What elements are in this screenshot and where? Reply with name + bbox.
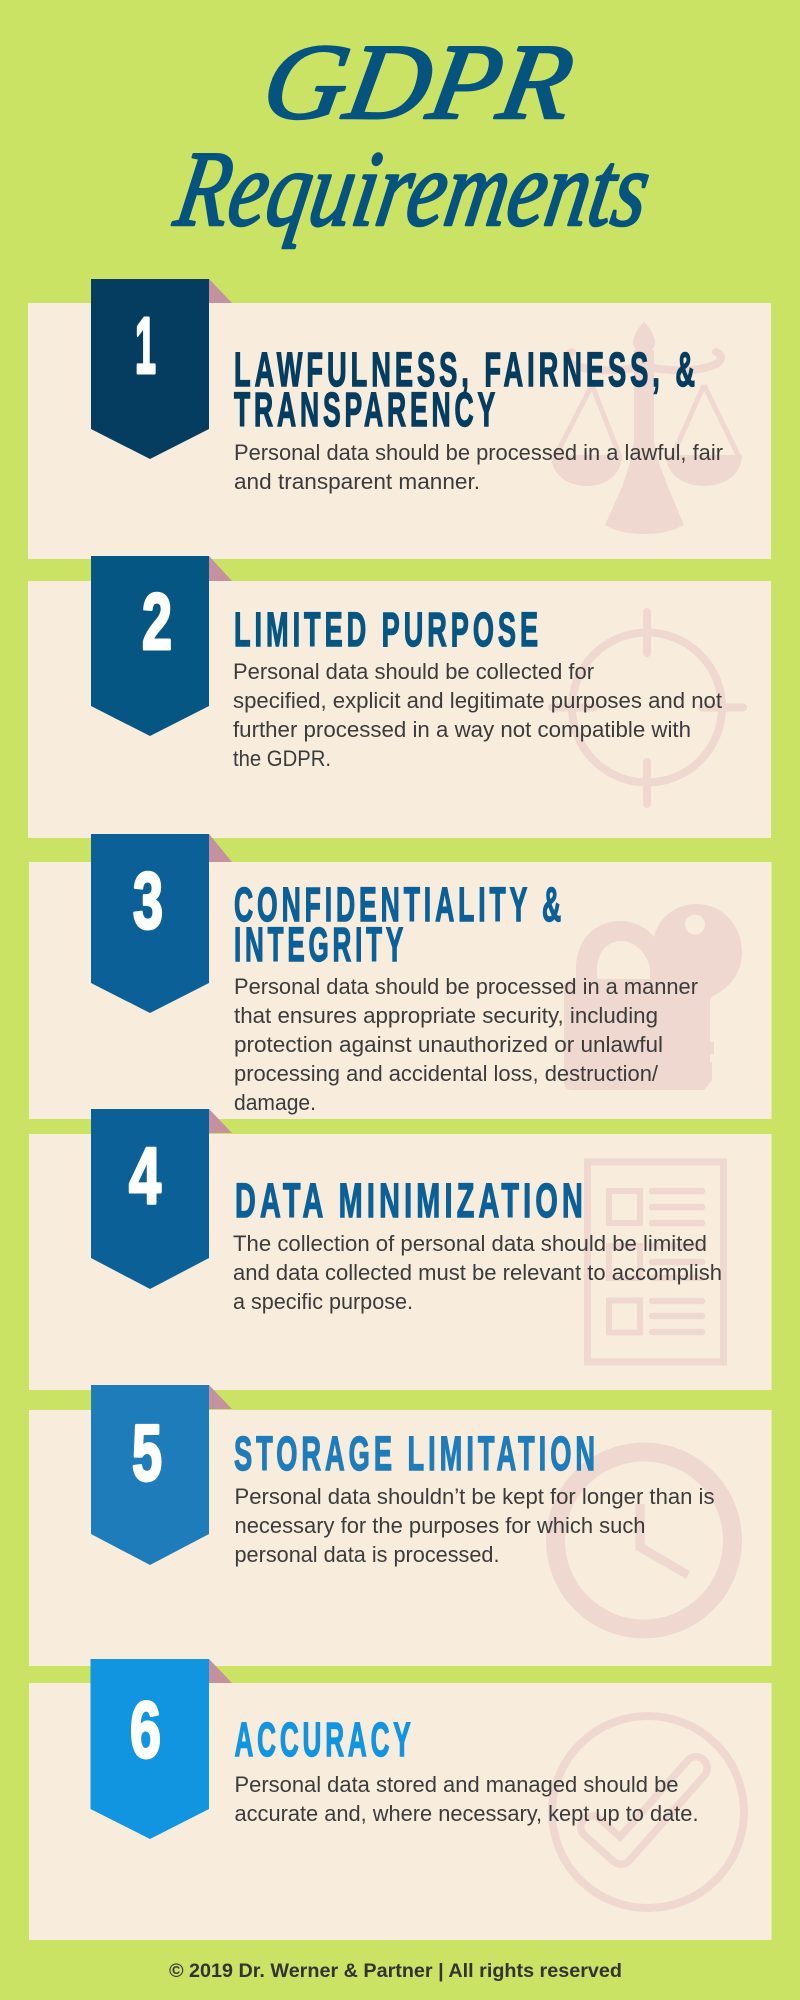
text: accuracy description [234,1772,698,1826]
text: lawfulness description: and transparent manner. [234,469,480,494]
heading 3: INTEGRITY [234,919,407,972]
icon: target crosshair [552,612,743,804]
panel: lawfulness, fairness and transparency [28,303,771,559]
text: accuracy description: Personal data stored and managed should be [234,1772,678,1797]
icon: document with checklist [588,1162,724,1362]
text: confidentiality description: that ensures appropriate security, including [234,1003,658,1028]
icon: scales of justice [551,322,742,534]
title [167,22,659,249]
ribbon 2 [91,556,232,736]
text: storage limitation description: Personal data shouldn’t be kept for longer than is [234,1484,714,1509]
ribbon 5: 5 [132,1408,162,1497]
panel: storage limitation [29,1410,772,1666]
panel: confidentiality and integrity [29,862,772,1119]
heading 1: TRANSPARENCY [234,384,499,437]
title: Requirements [167,129,659,249]
ribbon 1 [91,279,232,459]
text: limited purpose description: Personal data should be collected for [233,659,594,684]
text: limited purpose description [233,659,722,771]
heading 1 [234,344,699,437]
icon: clock [556,1452,732,1629]
ribbon 6 [90,1659,232,1839]
ribbon 4: 4 [129,1131,161,1220]
ribbon 1: 1 [135,301,156,390]
text: confidentiality description: processing and accidental loss, destruction/ [234,1061,659,1086]
ribbon 6: 6 [130,1685,161,1774]
ribbon 5 [91,1385,232,1565]
text: limited purpose description: specified, explicit and legitimate purposes and not [233,688,722,713]
ribbon 3: 3 [133,856,163,945]
text: storage limitation description: personal data is processed. [234,1542,500,1567]
heading 2: LIMITED PURPOSE [234,604,542,657]
icon: padlock and key [564,904,742,1090]
icon: check mark in circle [552,1716,744,1908]
text: lawfulness description: Personal data should be processed in a lawful, fair [234,440,723,465]
text: data minimization description: and data collected must be relevant to accomplish [233,1260,722,1285]
heading 6: ACCURACY [234,1714,414,1767]
text: confidentiality description [234,974,698,1115]
title: GDPR [255,22,582,142]
panel: limited purpose [28,581,771,838]
panel: accuracy [29,1683,772,1940]
text: lawfulness description [234,440,723,494]
text: data minimization description [233,1231,722,1314]
text: confidentiality description: protection against unauthorized or unlawful [234,1032,663,1057]
text: limited purpose description: further processed in a way not compatible with [233,717,691,742]
ribbon 3 [91,834,232,1013]
text: limited purpose description: the GDPR. [233,746,331,771]
text: storage limitation description [234,1484,714,1567]
heading 3 [234,879,565,972]
text: data minimization description: The collection of personal data should be limited [233,1231,707,1256]
text: confidentiality description: Personal data should be processed in a manner [234,974,698,999]
footer: © 2019 Dr. Werner & Partner | All rights reserved [169,1961,622,1982]
text: data minimization description: a specific purpose. [233,1289,413,1314]
ribbon 4 [91,1109,232,1289]
text: storage limitation description: necessary for the purposes for which such [234,1513,646,1538]
text: accuracy description: accurate and, where necessary, kept up to date. [234,1801,698,1826]
ribbon 2: 2 [142,577,172,666]
text: confidentiality description: damage. [234,1090,316,1115]
panel: data minimization [29,1134,772,1390]
